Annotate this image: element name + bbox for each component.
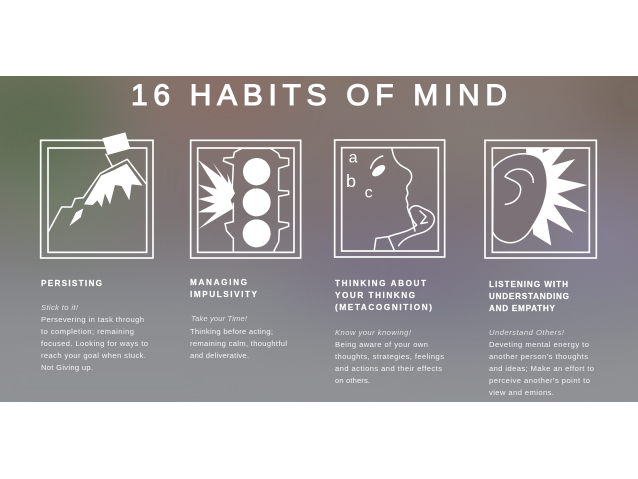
text: persisting description: reach your goal when stuck. — [41, 351, 146, 360]
heading: listening — [489, 280, 569, 313]
heading: managing impulsivity: IMPULSIVITY — [190, 290, 258, 299]
panel: managing impulsivity — [190, 278, 287, 360]
text: metacognition description: on others. — [335, 376, 370, 385]
heading: listening: AND EMPATHY — [489, 304, 556, 313]
text: metacognition description: thoughts, strategies, feelings — [335, 352, 444, 361]
icon: mountain with flag — [41, 132, 153, 258]
text: listening description: Deveting mental energy to — [489, 340, 589, 349]
text: managing impulsivity description: and deliverative. — [190, 351, 249, 360]
text: listening description — [489, 328, 594, 397]
heading: listening: UNDERSTANDING — [489, 292, 569, 301]
heading: metacognition: YOUR THINKNG — [335, 291, 415, 300]
text: metacognition description: Being aware of your own — [335, 340, 428, 349]
icon: thinking face — [335, 140, 445, 257]
heading: metacognition — [335, 279, 432, 312]
background band — [0, 76, 638, 402]
text: persisting description: to completion; remaining — [41, 327, 134, 336]
icon: thinking face: b — [346, 171, 356, 191]
text: persisting description: Persevering in task through — [41, 315, 144, 324]
text: persisting description — [41, 303, 148, 372]
title: 16 HABITS OF MIND — [131, 79, 507, 112]
panel: metacognition — [335, 279, 444, 385]
icon: traffic light with burst — [191, 140, 301, 258]
text: listening description: and ideas; Make an effort to — [489, 364, 594, 373]
text: persisting description: Not Giving up. — [41, 363, 93, 372]
text: listening description: another person's thoughts — [489, 352, 588, 361]
text: persisting description: Stick to it! — [41, 303, 79, 312]
heading: managing impulsivity — [190, 278, 258, 299]
text: listening description: Understand Others! — [489, 328, 565, 337]
text: metacognition description: Know your knowing! — [335, 328, 412, 337]
heading: metacognition: THINKING ABOUT — [335, 279, 426, 288]
panel: listening with understanding — [489, 280, 594, 397]
icon: thinking face: a — [349, 149, 358, 166]
text: managing impulsivity description: remaining calm, thoughtful — [190, 339, 287, 348]
text: metacognition description — [335, 328, 444, 385]
icon: ear with burst — [485, 140, 596, 258]
heading: managing impulsivity: MANAGING — [190, 278, 247, 287]
text: managing impulsivity description: Take your Time! — [191, 314, 248, 323]
heading: metacognition: (METACOGNITION) — [335, 303, 432, 312]
panel: persisting — [41, 279, 148, 372]
heading: persisting: PERSISTING — [41, 279, 102, 288]
text: metacognition description: and actions and their effects — [335, 364, 442, 373]
text: managing impulsivity description: Thinking before acting; — [190, 327, 273, 336]
text: listening description: view and emions. — [489, 388, 554, 397]
text: managing impulsivity description — [190, 314, 287, 360]
text: persisting description: focused. Looking for ways to — [41, 339, 148, 348]
icon: thinking face: c — [365, 185, 373, 202]
heading: listening: LISTENING WITH — [489, 280, 568, 289]
text: listening description: perceive another's point to — [489, 376, 590, 385]
